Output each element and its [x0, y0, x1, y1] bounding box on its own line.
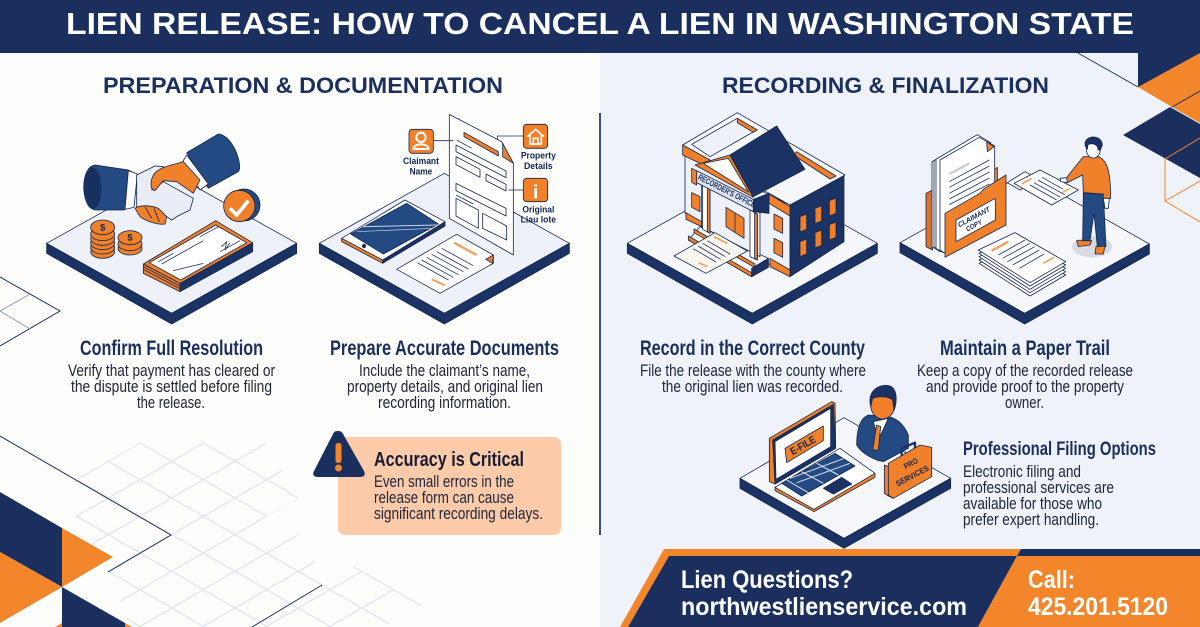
illustration: paper trail folder and person — [900, 135, 1149, 324]
panel background: left — [0, 53, 600, 627]
callout: accuracy is critical: Even small errors in the — [374, 472, 514, 491]
callout: accuracy is critical: significant recording delays. — [374, 504, 543, 523]
illustration: handshake, coins and check — [47, 134, 297, 324]
step text: maintain a paper trail — [917, 337, 1133, 412]
building sign: RECORDER'S OFFICE — [696, 172, 758, 210]
upright form document — [449, 114, 513, 255]
step text: prepare accurate documents: property details, and original lien — [347, 377, 543, 396]
laptop: E-FILE — [789, 435, 818, 458]
icon: property details: Details — [524, 161, 553, 171]
footer website: Lien Questions? — [681, 566, 853, 594]
step text: professional filing options — [963, 439, 1156, 529]
footer contact banner — [620, 549, 1200, 627]
icon: tablet — [342, 200, 445, 263]
briefcase: PRO — [902, 456, 920, 471]
icon: claimant name: Claimant — [403, 156, 439, 166]
step text: professional filing options: prefer expert handling. — [963, 510, 1099, 529]
decorative triangles: bottom left — [0, 492, 132, 627]
step text: professional filing options: Electronic filing and — [963, 462, 1081, 481]
icon: property details: Property — [521, 151, 557, 161]
recorded document — [674, 233, 747, 273]
step text: record in the correct county: the original lien was recorded. — [662, 377, 843, 396]
icon: original lien note: Original — [522, 204, 554, 214]
step text: confirm full resolution: Confirm Full Resolution — [80, 337, 263, 360]
document being handed over — [1007, 170, 1078, 205]
footer phone: Call: — [1028, 566, 1075, 594]
footer website: northwestlienservice.com — [681, 593, 967, 621]
step text: maintain a paper trail: Keep a copy of the recorded release — [917, 361, 1133, 380]
step text: prepare accurate documents: recording information. — [378, 393, 511, 412]
step text: prepare accurate documents: Include the claimant’s name, — [359, 361, 530, 380]
illustration: handshake, coins and check: $ — [100, 222, 106, 232]
panel background: right — [600, 53, 1200, 627]
step text: confirm full resolution — [68, 337, 275, 412]
step text: maintain a paper trail: and provide proof to the property — [926, 377, 1124, 396]
briefcase — [884, 443, 932, 498]
heading: recording and finalization: RECORDING & FINALIZATION — [722, 73, 1049, 98]
illustration: e-file laptop and professional — [740, 385, 951, 548]
step text: prepare accurate documents: Prepare Accurate Documents — [330, 337, 559, 360]
professional person — [857, 385, 908, 462]
callout: accuracy is critical — [313, 431, 561, 535]
step text: confirm full resolution: Verify that payment has cleared or — [68, 361, 275, 380]
icon: original lien note: Liau lote — [521, 214, 556, 224]
stacked papers — [978, 233, 1066, 296]
heading: preparation and documentation: PREPARATION & DOCUMENTATION — [103, 73, 503, 98]
step text: confirm full resolution: the release. — [137, 393, 205, 412]
step text: professional filing options: professional services are — [963, 478, 1114, 497]
center divider — [599, 113, 601, 535]
illustration: tablet, documents and callouts — [319, 114, 569, 324]
step text: maintain a paper trail: owner. — [1005, 393, 1044, 412]
laptop — [769, 402, 875, 512]
folder with documents: COPY — [965, 219, 985, 233]
step text: record in the correct county: Record in the Correct County — [640, 337, 865, 360]
entrance steps — [688, 227, 768, 277]
callout: accuracy is critical: Accuracy is Critical — [374, 449, 524, 471]
icon: property details — [521, 124, 557, 171]
background grid: left side — [0, 277, 422, 627]
folder with documents — [926, 135, 1006, 257]
icon: original lien note: i — [533, 182, 538, 203]
step text: record in the correct county — [640, 337, 866, 396]
step text: maintain a paper trail: Maintain a Paper Trail — [940, 337, 1110, 360]
icon: original lien note — [521, 178, 556, 224]
person — [1060, 137, 1112, 257]
step text: prepare accurate documents — [330, 337, 559, 412]
illustration: handshake, coins and check: $ — [127, 233, 133, 243]
title: LIEN RELEASE: HOW TO CANCEL A LIEN IN WASHINGTON STATE — [66, 6, 1134, 41]
step text: professional filing options: available for those who — [963, 494, 1102, 513]
icon: claimant name: Name — [410, 166, 432, 176]
callout: accuracy is critical: release form can cause — [374, 488, 514, 507]
title bar — [0, 0, 1200, 53]
footer website — [681, 566, 967, 621]
windows — [692, 168, 836, 257]
folder with documents: CLAIMANT — [957, 206, 992, 229]
step text: confirm full resolution: the dispute is settled before filing — [71, 377, 272, 396]
footer phone — [1028, 566, 1168, 621]
icon: warning triangle — [313, 431, 365, 477]
illustration: county recorder building — [627, 113, 877, 324]
decorative shapes: top right — [1078, 53, 1200, 222]
icon: claimant name — [403, 129, 439, 176]
step text: record in the correct county: File the release with the county where — [640, 361, 866, 380]
footer phone: 425.201.5120 — [1028, 593, 1168, 621]
briefcase: SERVICES — [894, 463, 931, 488]
flat document — [397, 234, 493, 293]
